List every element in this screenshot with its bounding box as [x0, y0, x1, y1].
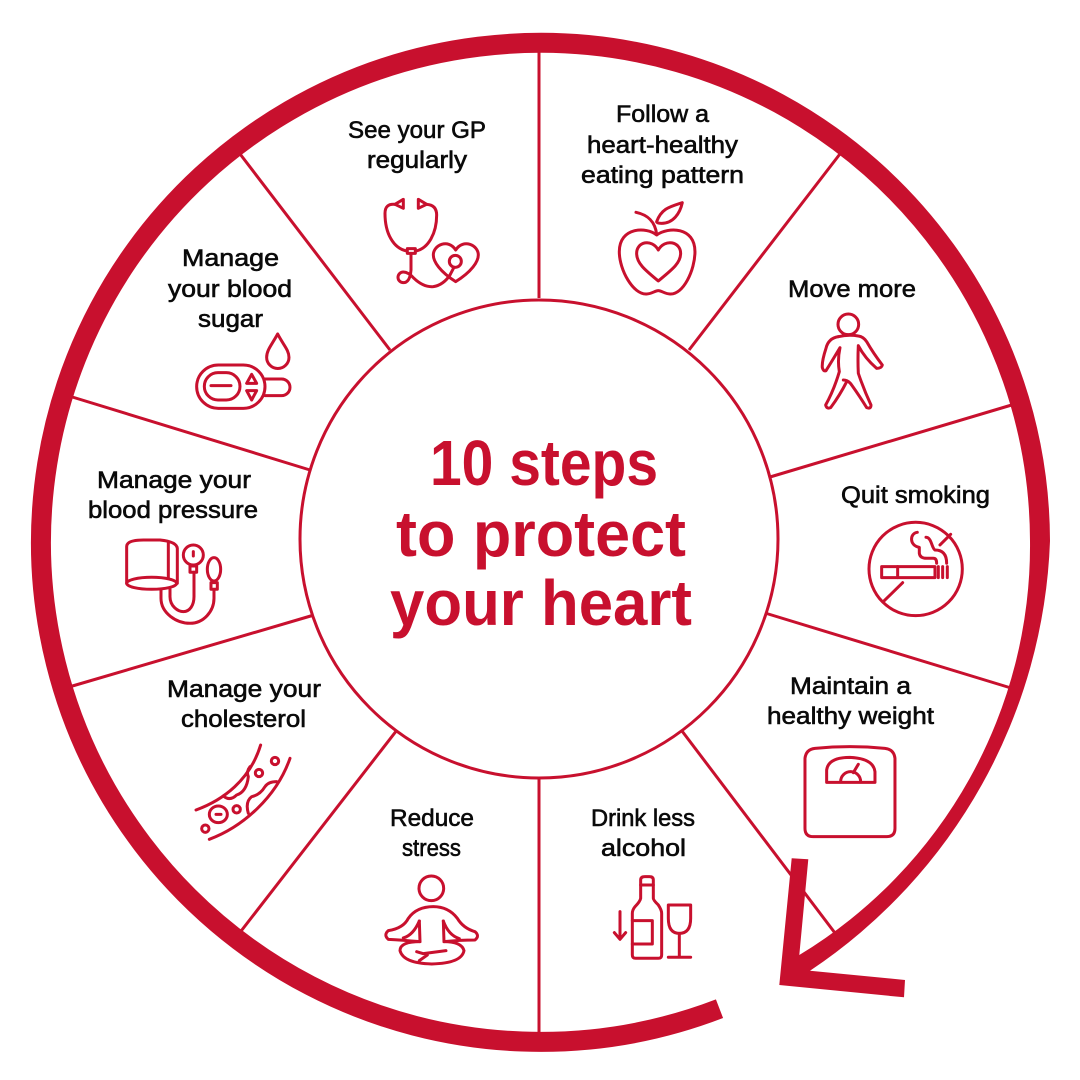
- icon: stethoscope and heart: [385, 199, 478, 287]
- icon: bottle and glass: [614, 877, 691, 958]
- panel: healthy eating: [581, 101, 744, 294]
- label: manage blood pressure: blood pressure: [88, 497, 258, 524]
- label: manage blood sugar: sugar: [198, 306, 263, 333]
- label: manage blood sugar: Manage: [182, 245, 279, 272]
- label: healthy weight: Maintain a: [790, 673, 912, 700]
- label: manage cholesterol: cholesterol: [181, 706, 306, 733]
- icon: apple with heart: [619, 203, 695, 294]
- label: manage blood sugar: your blood: [168, 276, 292, 303]
- label: drink less alcohol: alcohol: [601, 835, 686, 862]
- icon: walking person: [822, 314, 882, 408]
- label: see your GP: regularly: [367, 147, 467, 174]
- label: drink less alcohol: Drink less: [591, 805, 695, 832]
- panel: manage blood pressure: [88, 467, 258, 623]
- icon: artery with plaque: [196, 745, 290, 839]
- panel: drink less alcohol: [591, 805, 695, 958]
- label: reduce stress: Reduce: [390, 805, 474, 832]
- label: healthy weight: healthy weight: [767, 703, 934, 730]
- label: manage blood sugar: [168, 245, 292, 333]
- icon: glucose meter and drop: [197, 334, 290, 408]
- panel: quit smoking: [841, 482, 990, 616]
- icon: blood pressure cuff: [127, 540, 221, 623]
- label: manage blood pressure: Manage your: [97, 467, 251, 494]
- label: see your GP: See your GP: [348, 117, 486, 144]
- panel: see your GP: [348, 117, 486, 287]
- label: healthy eating: eating pattern: [581, 162, 744, 189]
- title: to protect: [396, 498, 686, 570]
- label: drink less alcohol: [591, 805, 695, 862]
- label: reduce stress: [390, 805, 474, 862]
- label: manage cholesterol: Manage your: [167, 676, 321, 703]
- title: your heart: [390, 567, 692, 639]
- label: reduce stress: stress: [402, 835, 461, 862]
- label: quit smoking: Quit smoking: [841, 482, 990, 509]
- icon: weighing scale: [805, 747, 895, 837]
- label: see your GP: [348, 117, 486, 174]
- label: move more: Move more: [788, 276, 916, 303]
- label: healthy eating: [581, 101, 744, 189]
- panel: reduce stress: [386, 805, 477, 964]
- label: healthy weight: [767, 673, 934, 730]
- panel: manage cholesterol: [167, 676, 321, 839]
- panel: move more: [788, 276, 916, 408]
- panel: manage blood sugar: [168, 245, 292, 408]
- icon: no smoking sign: [869, 522, 962, 616]
- label: manage cholesterol: [167, 676, 321, 733]
- panel: healthy weight: [767, 673, 934, 837]
- label: manage blood pressure: [88, 467, 258, 524]
- title: 10 steps: [430, 427, 658, 499]
- central circle: [300, 300, 778, 778]
- title: [390, 427, 692, 639]
- label: healthy eating: heart-healthy: [587, 132, 738, 159]
- label: healthy eating: Follow a: [616, 101, 710, 128]
- icon: meditating person: [386, 876, 477, 964]
